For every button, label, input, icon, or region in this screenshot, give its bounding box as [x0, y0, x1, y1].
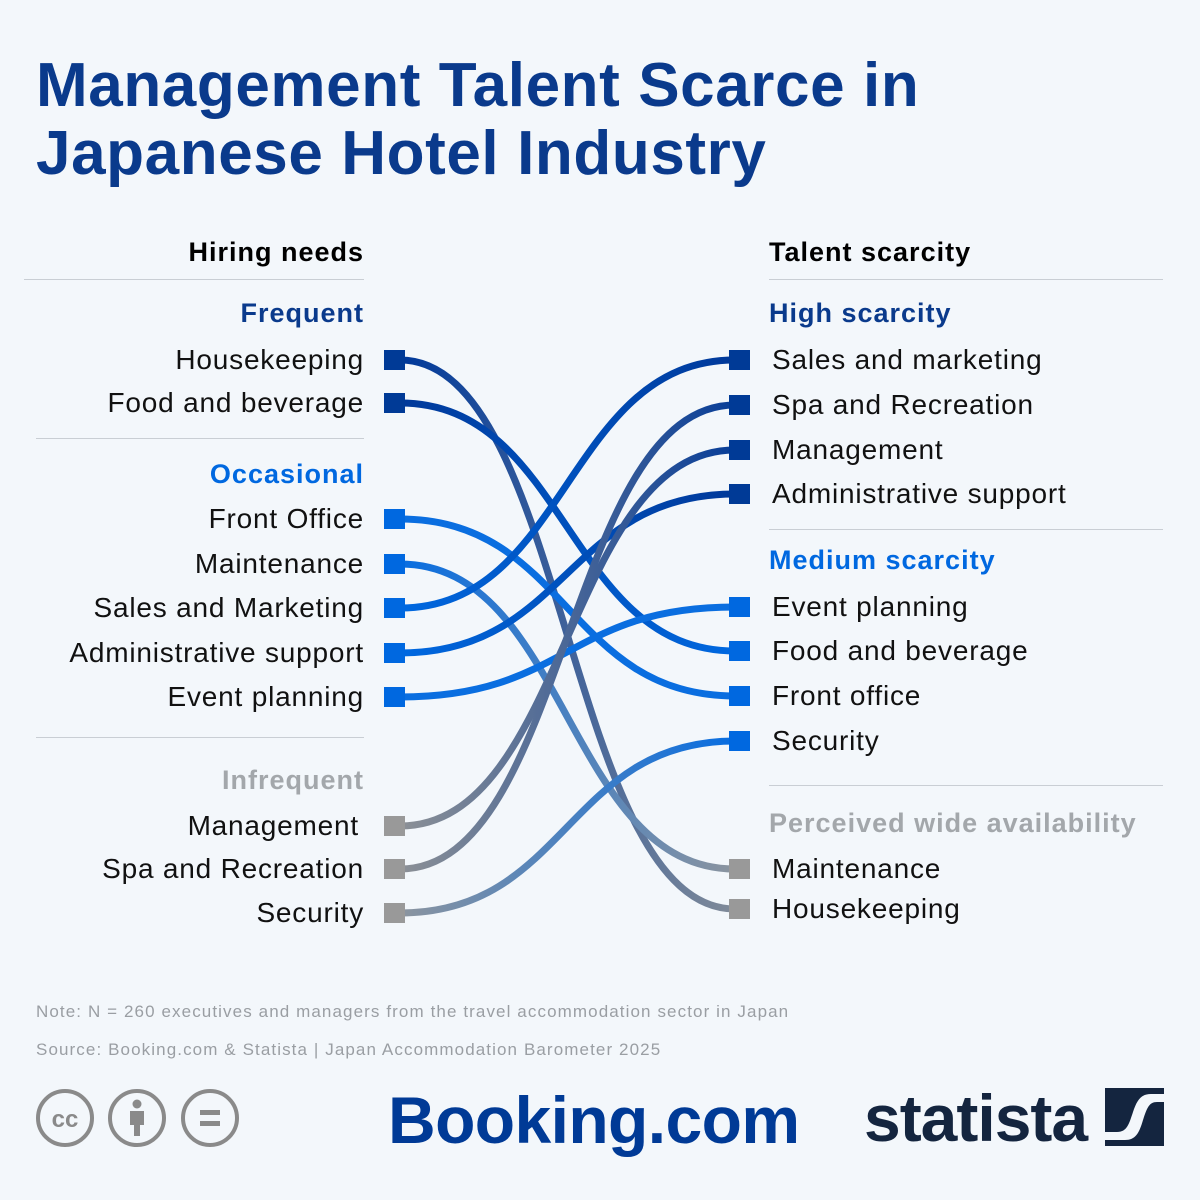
icons: creative commons: cc — [52, 1106, 78, 1133]
right labels — [769, 298, 1137, 924]
text: Infrequent — [222, 765, 364, 795]
title: Management Talent Scarce in — [36, 51, 919, 120]
text: Occasional — [210, 459, 364, 489]
title — [36, 51, 919, 188]
text: Food and beverage — [108, 387, 364, 418]
text: High scarcity — [769, 298, 952, 328]
text: Food and beverage — [772, 635, 1028, 666]
text: Maintenance — [195, 548, 364, 579]
title: Japanese Hotel Industry — [36, 119, 766, 188]
text: Front Office — [209, 503, 364, 534]
text: Sales and Marketing — [94, 592, 364, 623]
text: Security — [772, 725, 880, 756]
text: Sales and marketing — [772, 344, 1042, 375]
text: Spa and Recreation — [772, 389, 1034, 420]
text: Medium scarcity — [769, 545, 996, 575]
left labels — [69, 344, 364, 928]
text: Perceived wide availability — [769, 808, 1137, 838]
logo: statista: statista — [864, 1081, 1087, 1155]
text: Administrative support — [69, 637, 364, 668]
note: Note: N = 260 executives and managers from the travel accommodation sector in Japan — [36, 1002, 789, 1021]
source: Source: Booking.com & Statista | Japan Accommodation Barometer 2025 — [36, 1040, 661, 1059]
text: Housekeeping — [175, 344, 364, 375]
right column header: Talent scarcity — [769, 237, 971, 267]
text: Front office — [772, 680, 921, 711]
text: Event planning — [168, 681, 364, 712]
text: Spa and Recreation — [102, 853, 364, 884]
icons: creative commons — [36, 1089, 239, 1147]
text: Maintenance — [772, 853, 941, 884]
text: Administrative support — [772, 478, 1067, 509]
text: Management — [772, 434, 943, 465]
text: Event planning — [772, 591, 968, 622]
text: Housekeeping — [772, 893, 961, 924]
left column header: Hiring needs — [188, 237, 364, 267]
text: Security — [256, 897, 364, 928]
left group: frequent: Frequent — [240, 298, 364, 328]
text: Management — [188, 810, 359, 841]
logo: Booking.com: Booking.com — [388, 1083, 799, 1157]
